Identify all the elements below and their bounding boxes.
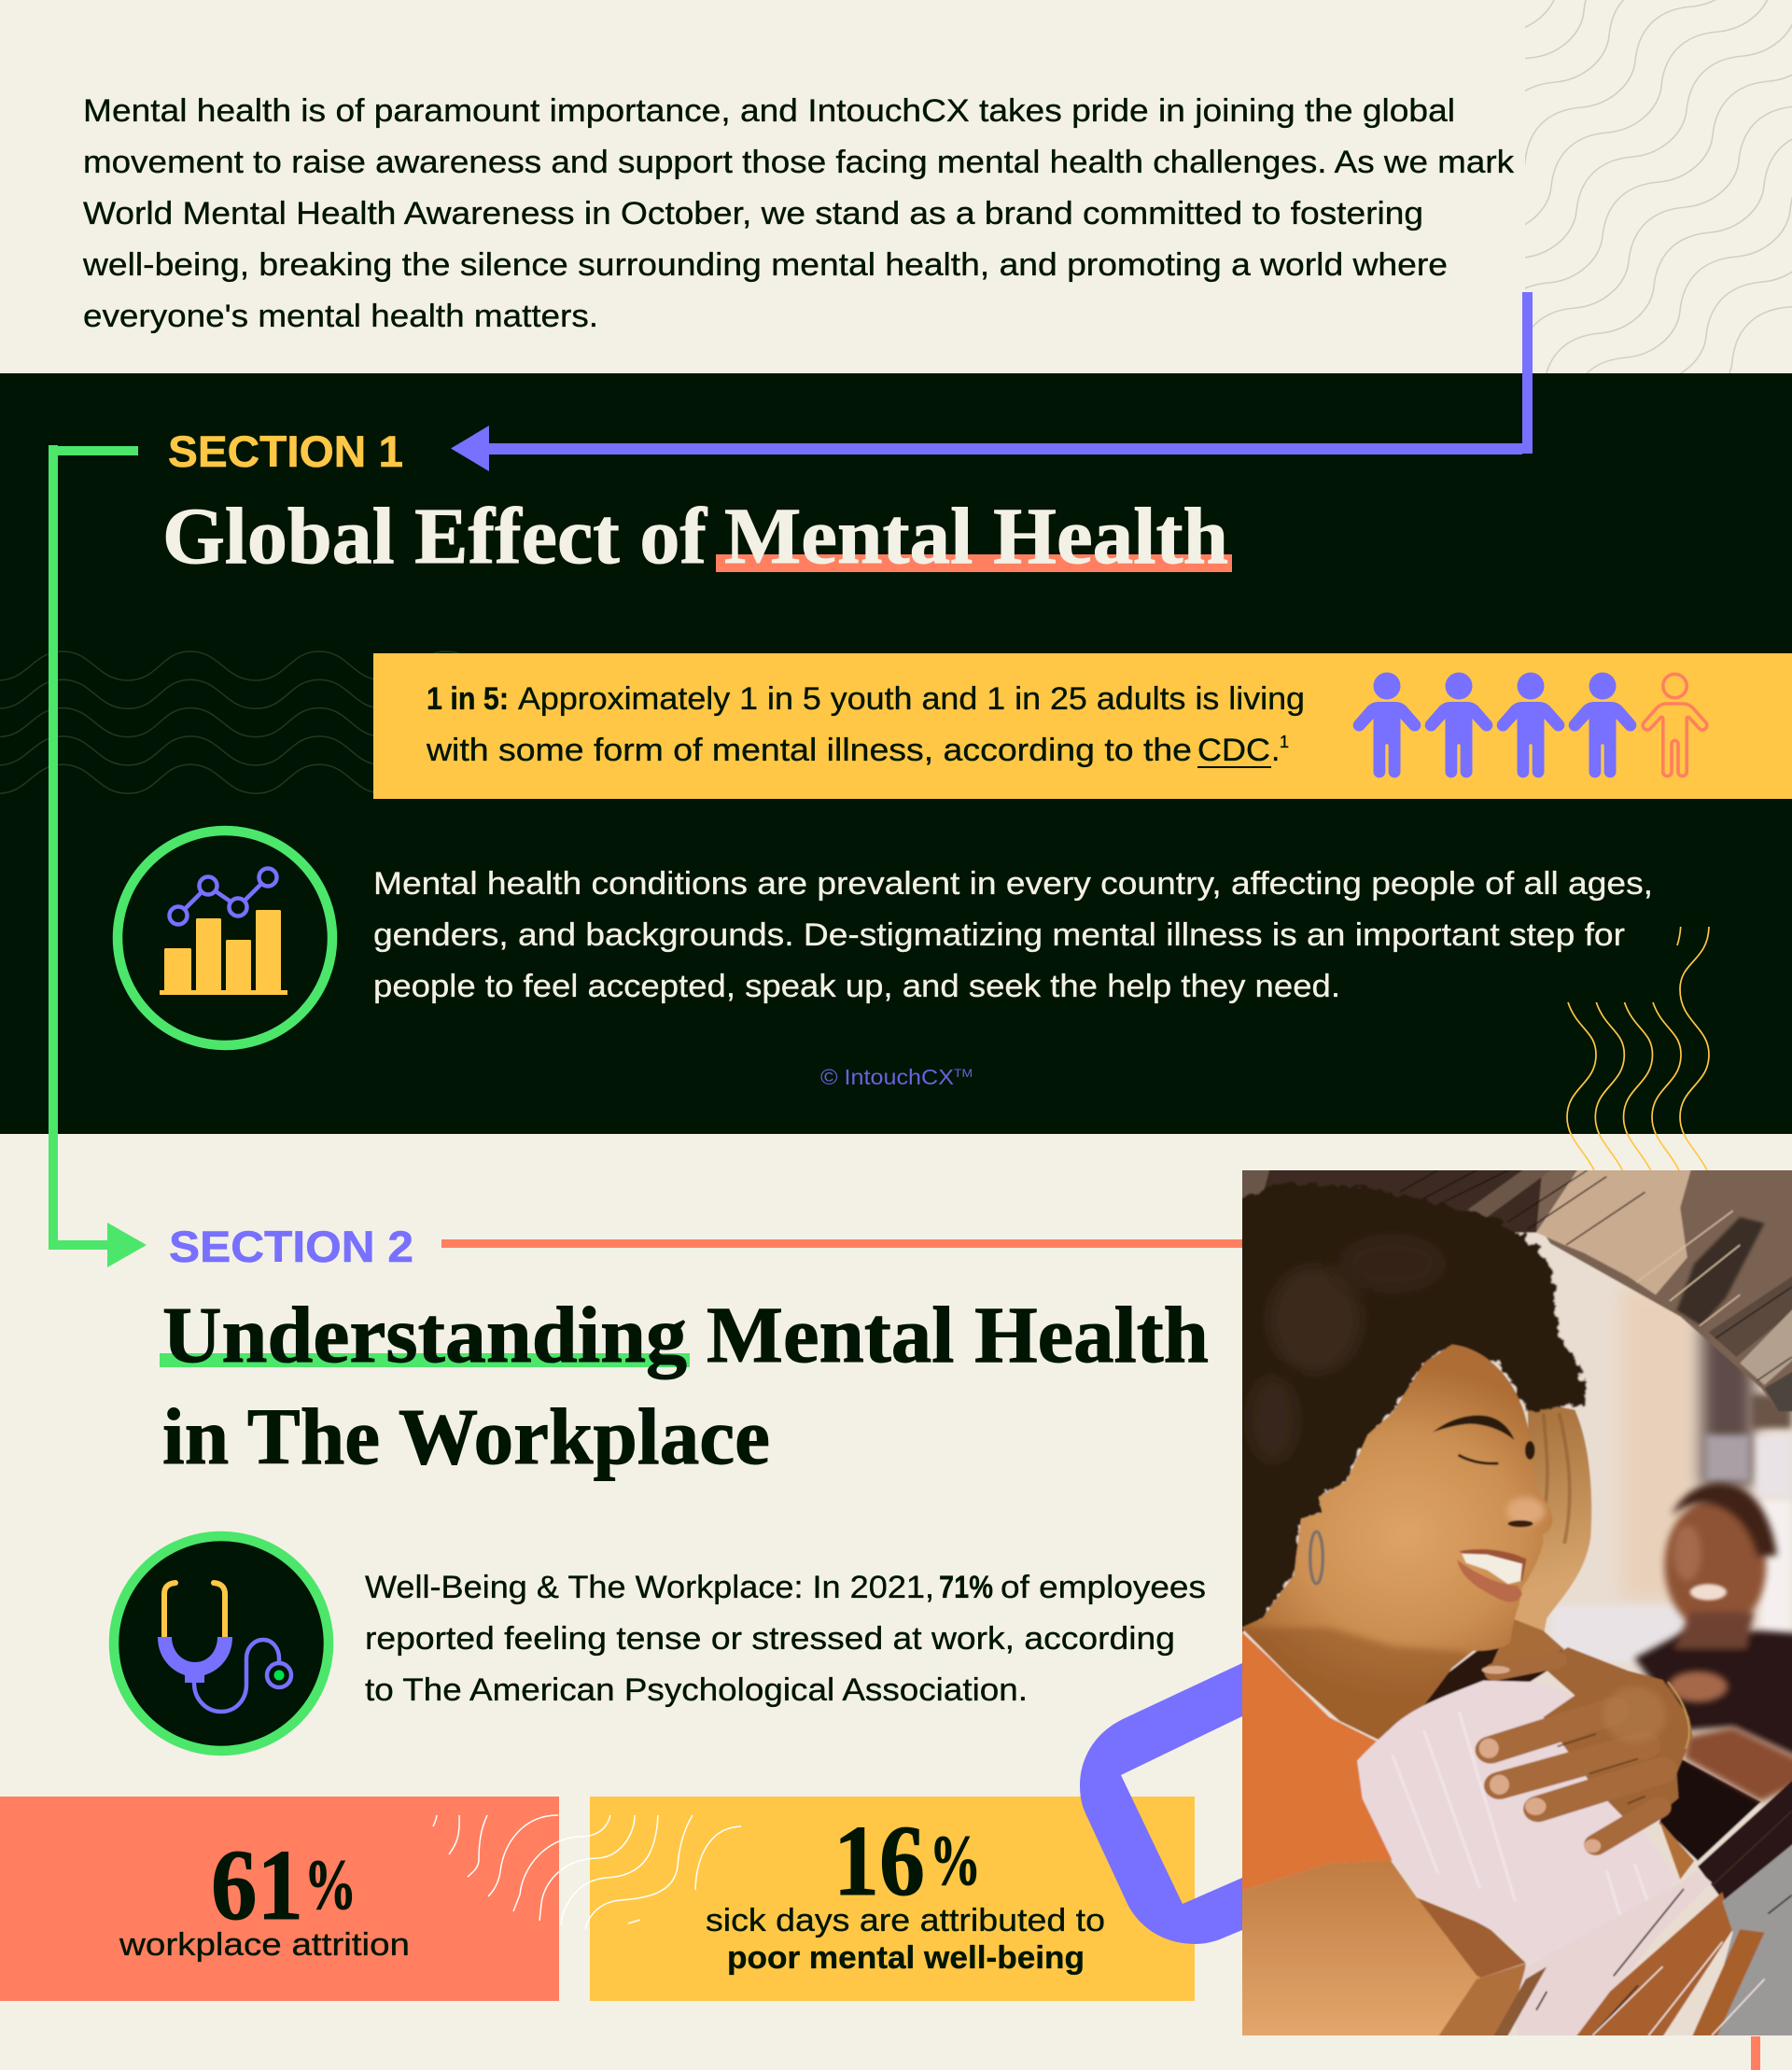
- stat label: sick days are attributed to: [706, 1903, 1105, 1938]
- stat number 61%: 61: [211, 1830, 303, 1941]
- text block: prevalence paragraph: genders, and backgrounds. De-stigmatizing mental illness is an important step for: [373, 917, 1625, 953]
- skin behind hug and dark gap: [1423, 1647, 1563, 1706]
- earring: [1310, 1532, 1323, 1584]
- decorative green waves: [0, 651, 511, 793]
- callout text: CDC: [1197, 733, 1270, 768]
- intro paragraph: well-being, breaking the silence surrounding mental health, and promoting a world where: [82, 247, 1448, 283]
- arrow: purple connector into section 1: [451, 292, 1533, 471]
- stat number 16%: [833, 1806, 981, 1917]
- decorative yellow squiggles: [1567, 927, 1709, 1170]
- arrow: green connector to section 2: [49, 445, 147, 1267]
- stat label: poor mental well-being: [727, 1940, 1085, 1976]
- heading label: section 2: SECTION 2: [169, 1222, 413, 1271]
- text block: well-being at work: Well-Being & The Workplace: In 2021,: [365, 1570, 934, 1605]
- heading label: section 1: SECTION 1: [168, 427, 403, 476]
- white shirt of hugged person: [1357, 1681, 1694, 1979]
- heading: understanding mental health in the workplace: Mental Health: [707, 1290, 1209, 1379]
- heading: global effect of mental health: Global Effect of: [162, 491, 707, 580]
- blonde hair of hugged person: [1508, 1401, 1591, 1637]
- salmon connector below photo: [1751, 2036, 1760, 2070]
- arm in foreground: [1242, 1859, 1480, 2035]
- intro paragraph: [82, 93, 1515, 334]
- closed eye: [1458, 1455, 1498, 1463]
- text block: well-being at work: to The American Psychological Association.: [365, 1672, 1028, 1708]
- eyebrow: [1433, 1415, 1515, 1440]
- icon: stethoscope in circle: [114, 1536, 329, 1751]
- callout text: .: [1271, 733, 1280, 768]
- icon: chart in circle: [118, 831, 332, 1045]
- callout text: 1: [1280, 733, 1289, 751]
- heading: understanding mental health in the workplace: in The Workplace: [162, 1392, 770, 1481]
- stat number 16%: %: [930, 1822, 981, 1900]
- decorative white squiggles: [433, 1815, 741, 1929]
- photo streak top: [1227, 1158, 1792, 1411]
- heading: global effect of mental health: Mental Health: [724, 491, 1228, 580]
- icon: people 4 of 5: [1353, 672, 1707, 777]
- text block: prevalence paragraph: Mental health conditions are prevalent in every country, affecting people of all ages,: [373, 866, 1653, 902]
- callout text: Approximately 1 in 5 youth and 1 in 25 adults is living: [518, 681, 1305, 717]
- text block: prevalence paragraph: [373, 866, 1653, 1004]
- stat label: [706, 1903, 1105, 1976]
- photo background wall: [1242, 1232, 1792, 2035]
- stat number 61%: [211, 1830, 357, 1941]
- stat number 16%: 16: [833, 1806, 925, 1917]
- face and neck: [1227, 1345, 1552, 1749]
- photo streak bottom: [1438, 1780, 1792, 2035]
- intro paragraph: World Mental Health Awareness in October, we stand as a brand committed to fostering: [83, 196, 1423, 231]
- panel: 16% stat: [590, 1797, 1195, 2001]
- panel: 61% stat: [0, 1797, 559, 2001]
- stat label: workplace attrition: [119, 1927, 410, 1963]
- heading: understanding mental health in the workplace: [160, 1290, 1209, 1481]
- purple bracket shape: [1080, 1663, 1242, 1944]
- heading: global effect of mental health: [162, 491, 1232, 580]
- callout text: with some form of mental illness, according to the: [426, 733, 1192, 768]
- panel: section 1 dark background: [0, 373, 1792, 1134]
- text block: well-being at work: 71%: [939, 1570, 993, 1605]
- heading: understanding mental health in the workplace: Understanding: [162, 1290, 687, 1379]
- callout text: 1 in 5:: [427, 681, 509, 717]
- intro paragraph: everyone's mental health matters.: [83, 299, 598, 334]
- copyright note: TM: [954, 1067, 973, 1080]
- intro paragraph: Mental health is of paramount importance, and IntouchCX takes pride in joining the global: [83, 93, 1455, 129]
- text block: well-being at work: reported feeling tense or stressed at work, according: [365, 1621, 1175, 1657]
- orange shirt: [1242, 1631, 1393, 1892]
- copyright note: © IntouchCX: [820, 1065, 954, 1089]
- callout text: [426, 681, 1305, 768]
- intro paragraph: movement to raise awareness and support those facing mental health challenges. As we mark: [83, 145, 1515, 180]
- photo: two women hugging, illustrated: [1227, 1158, 1792, 2048]
- text block: well-being at work: of employees: [1001, 1570, 1206, 1605]
- blurred person in background: [1634, 1484, 1792, 1861]
- salmon rule: [441, 1239, 1244, 1248]
- nostril: [1508, 1520, 1533, 1527]
- main figure hair: [1227, 1183, 1586, 1643]
- panel: 1 in 5 callout: [373, 653, 1792, 799]
- text block: well-being at work: [365, 1570, 1206, 1708]
- decorative wave pattern top right: [1525, 0, 1792, 373]
- text block: prevalence paragraph: people to feel accepted, speak up, and seek the help they need.: [373, 969, 1340, 1004]
- stat number 61%: %: [304, 1846, 357, 1924]
- mouth: [1459, 1549, 1526, 1581]
- hand on shoulder: [1479, 1647, 1692, 1853]
